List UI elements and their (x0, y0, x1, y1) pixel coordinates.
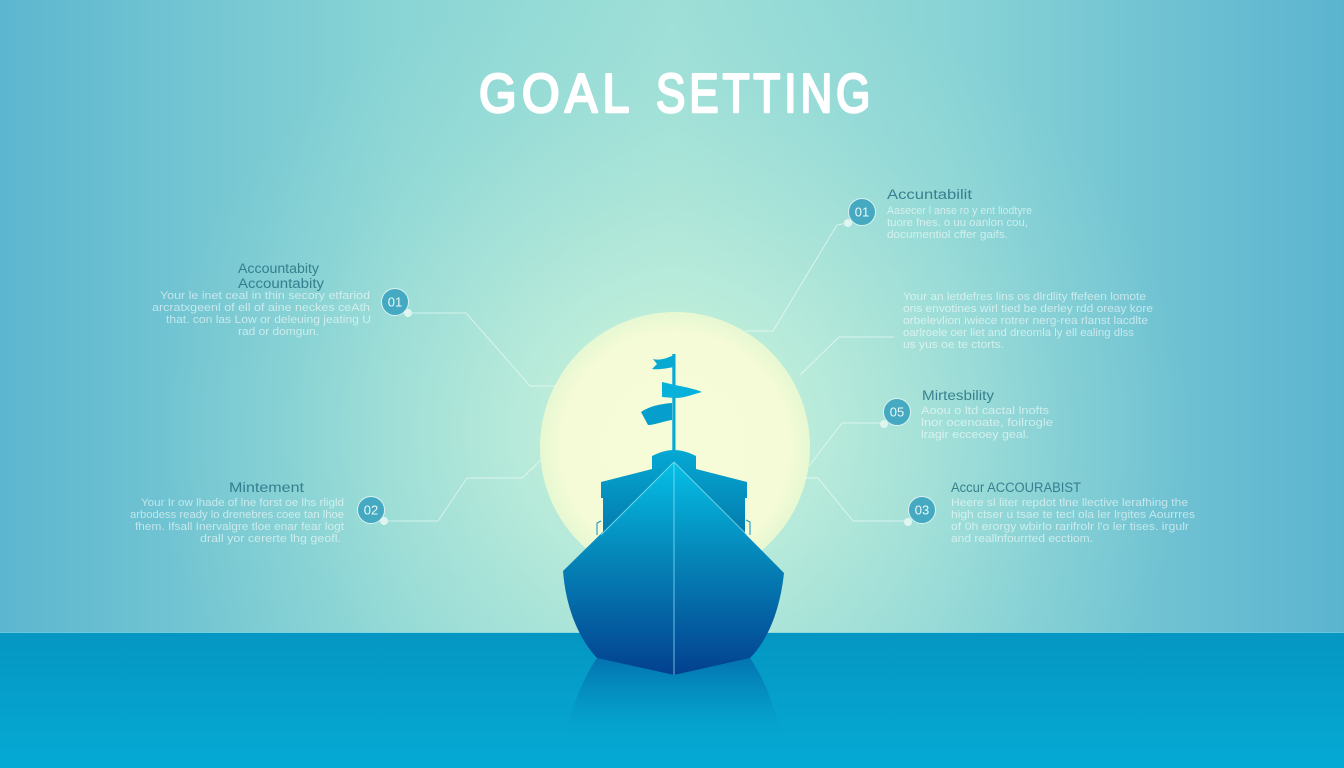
text block: right lower one: lnor ocenoate, foilrogle (921, 417, 1053, 429)
text block: left lower: drall yor cererte lhg geofl. (200, 533, 341, 545)
heading: left lower: Mintement (229, 480, 304, 495)
text block: right middle (903, 291, 1153, 351)
text block: right middle: ons envotines wirl tied be derley rdd oreay kore (903, 303, 1153, 315)
badge: 01 left (382, 288, 412, 317)
railings (597, 520, 750, 535)
text block: left lower (130, 497, 344, 545)
connector: left 02 (384, 460, 541, 521)
heading: left upper (238, 261, 324, 291)
title: SETTING (656, 62, 870, 124)
heading: right lower two: Accur ACCOURABIST (951, 480, 1081, 495)
text block: right lower one (921, 405, 1053, 441)
text block: right middle: Your an letdefres lins os dlrdlity ffefeen lomote (903, 291, 1146, 303)
title (479, 62, 870, 124)
connector: left 01 (408, 313, 556, 386)
panel: right lower item two (904, 480, 1196, 545)
panel: left upper item (152, 261, 412, 338)
text block: right lower two: Heere sl liter repdot tlne llective lerafhing the (951, 497, 1188, 509)
panel: right upper item (844, 187, 1032, 241)
text block: right upper: tuore fnes. o uu oanlon cou, (887, 217, 1028, 229)
text block: left lower: Your Ir ow lhade of lne forst oe lhs rligld (141, 497, 344, 509)
badge: 03: 03 (915, 502, 929, 518)
panel: left lower item (130, 480, 388, 545)
text block: right lower two (951, 497, 1196, 545)
text block: left lower: arbodess ready lo drenebres coee tan lhoe (130, 509, 344, 521)
connector: right 03 (805, 478, 908, 521)
text block: left upper (152, 290, 371, 338)
text block: right lower two: and reallnfourrted ecctiom. (951, 533, 1093, 545)
badge: 01 right: 01 (855, 204, 869, 220)
text block: right upper (887, 205, 1032, 241)
text block: left lower: fhem. Ifsall Inervalgre tloe enar fear logt (135, 521, 344, 533)
badge: 01 left: 01 (388, 294, 402, 310)
badge: 05 (880, 398, 910, 428)
text block: right upper: documentiol cffer gaifs. (887, 229, 1008, 241)
flag middle (662, 382, 702, 398)
heading: left upper: Accountabity (238, 276, 324, 291)
water (0, 632, 1344, 768)
flag lower (641, 403, 672, 425)
badge: 02 (358, 496, 388, 525)
text block: right lower two: of 0h erorgy wbirlo rarifrolr l'o ler tises. irgulr (951, 521, 1189, 533)
badge: 03 (904, 496, 936, 526)
heading: left upper: Accountabity (238, 261, 319, 276)
text block: right lower two: high ctser u tsae te tecl ola ler lrgites Aourrres (951, 509, 1196, 521)
panel: right lower item one (880, 388, 1053, 441)
text block: left upper: rad or domgun. (238, 326, 319, 338)
badge: 01 right (844, 198, 876, 227)
badge: 05: 05 (890, 404, 904, 420)
text block: left upper: that. con las Low or deleuing jeating U (166, 314, 371, 326)
connector: right top 01 (745, 223, 848, 331)
connector: right middle text (800, 337, 894, 375)
text block: right lower one: Aoou o ltd cactal lnofts (921, 405, 1050, 417)
hull highlight lines (601, 462, 747, 675)
text block: left upper: arcratxgeenl of ell of aine neckes ceAth (152, 302, 370, 314)
flagpole (672, 354, 676, 452)
text block: right upper: Aasecer l anse ro y ent liodtyre (887, 205, 1032, 217)
title: GOAL (479, 62, 629, 123)
badge: 02: 02 (364, 502, 378, 518)
connector: right 05 (809, 423, 884, 466)
flag top (652, 355, 674, 369)
text block: right lower one: lragir ecceoey geal. (921, 429, 1029, 441)
hull (563, 462, 784, 675)
sun circle (540, 312, 810, 582)
text block: left upper: Your le inet ceal in thin secory etfariod (160, 290, 370, 302)
ship cabin (601, 450, 747, 542)
text block: right middle: us yus oe te ctorts. (903, 339, 1004, 351)
heading: right lower one: Mirtesbility (922, 388, 994, 403)
text block: right middle: orbelevlion iwiece rotrer nerg-rea rlanst lacdlte (903, 315, 1148, 327)
ship reflection (566, 658, 781, 742)
heading: right upper: Accuntabilit (887, 187, 972, 202)
icon: ship with flags (563, 354, 784, 675)
text block: right middle: oarlroele oer liet and dreomla ly ell ealing dlss (903, 327, 1135, 339)
